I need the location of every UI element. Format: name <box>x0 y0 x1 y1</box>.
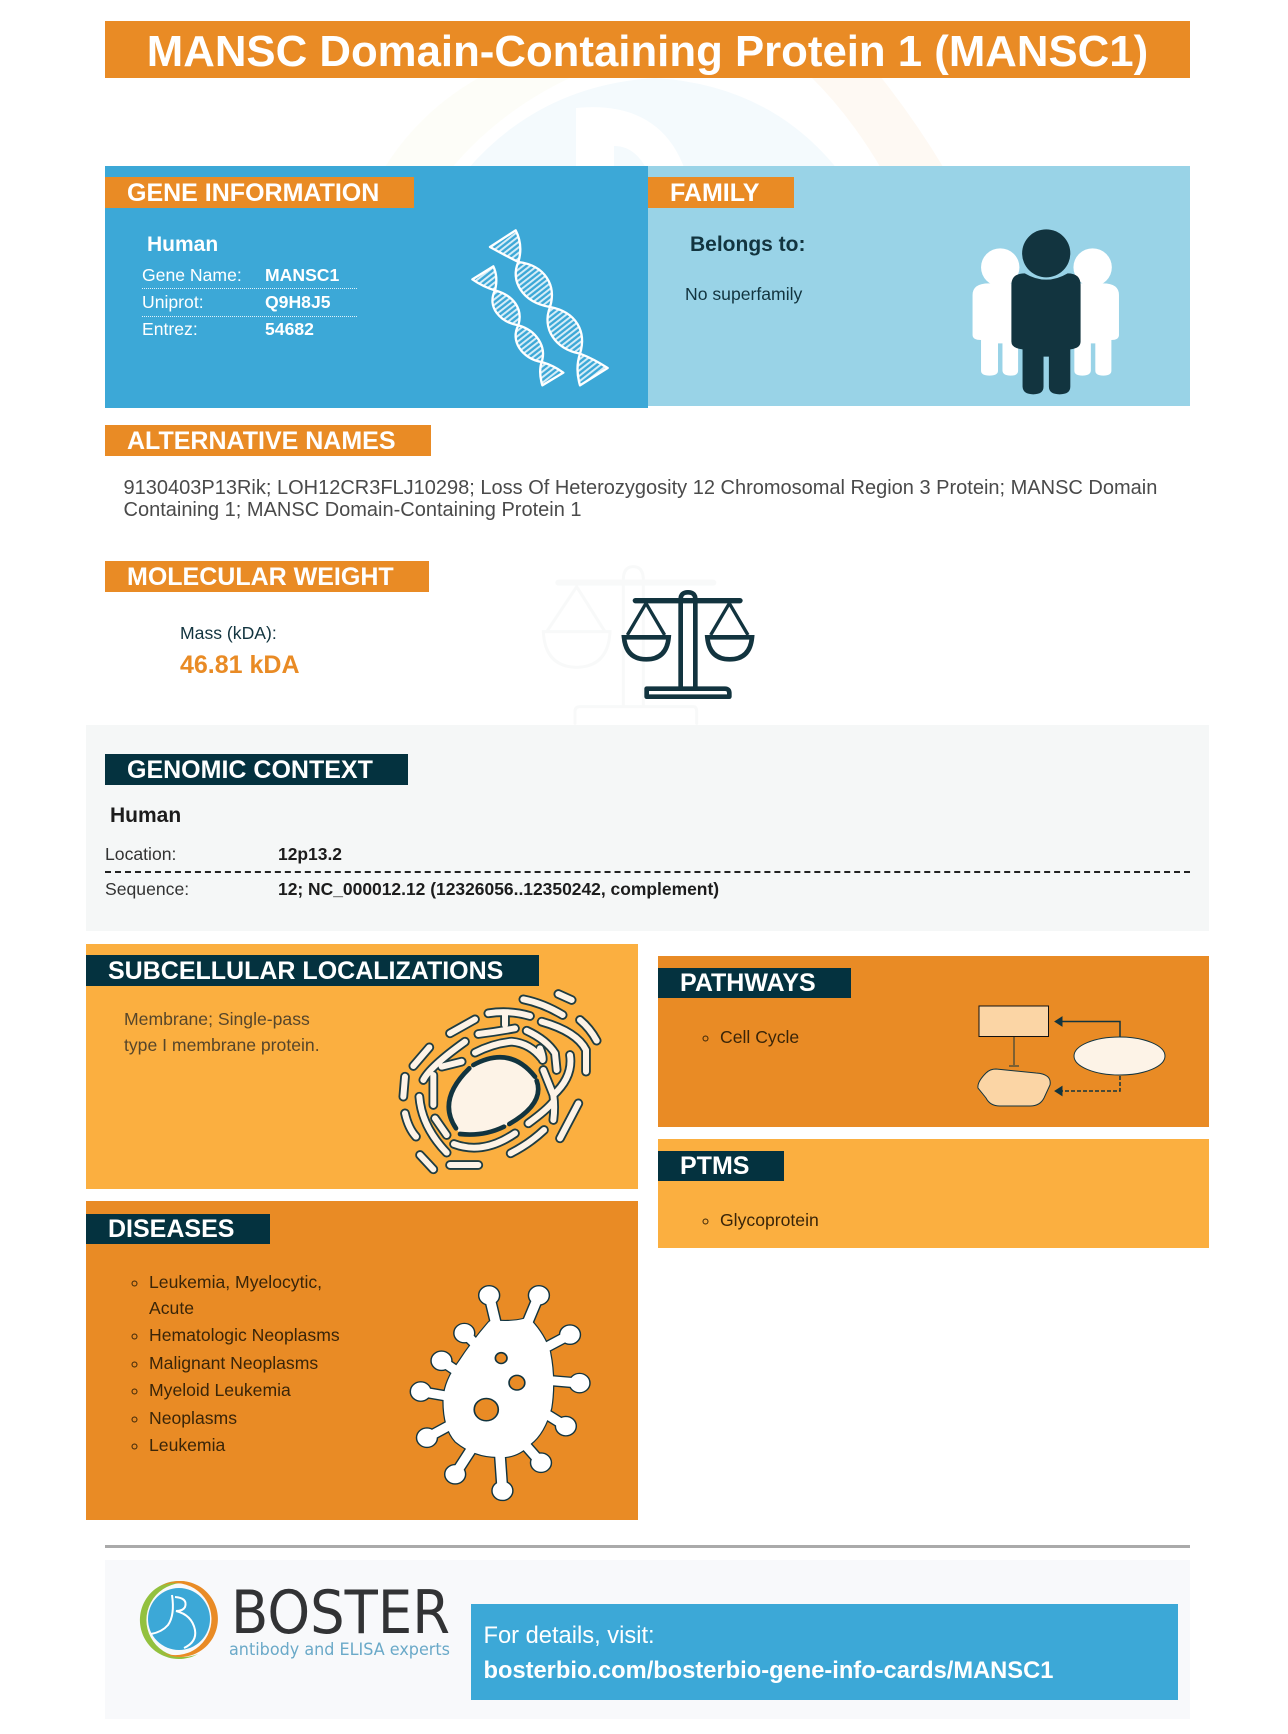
logo: boster <box>140 1578 450 1660</box>
disease list <box>132 1272 340 1455</box>
panel: footer <box>105 1560 1190 1719</box>
disease list: Neoplasms <box>149 1408 237 1428</box>
footer rule <box>105 1545 1190 1548</box>
species label: human: Human <box>110 804 181 826</box>
superfamily value: No superfamily <box>685 284 802 304</box>
disease list: Malignant Neoplasms <box>149 1353 318 1373</box>
heading: family: FAMILY <box>670 179 759 207</box>
gene name label: Gene Name: <box>142 265 242 285</box>
disease list: Hematologic Neoplasms <box>149 1325 340 1345</box>
entrez row <box>142 319 314 339</box>
species label: human: Human <box>147 233 218 256</box>
location value: 12p13.2 <box>278 844 342 864</box>
heading: genomic context: GENOMIC CONTEXT <box>127 756 373 784</box>
panel: family <box>648 166 1190 406</box>
callout intro: For details, visit: <box>484 1623 655 1649</box>
icon: dna double helix <box>471 229 609 386</box>
panel: subcellular localizations <box>86 944 638 1189</box>
title banner: MANSC Domain-Containing Protein 1 (MANSC1) <box>147 27 1148 76</box>
heading: gene information: GENE INFORMATION <box>127 179 379 207</box>
icon: endoplasmic reticulum cell <box>398 989 602 1174</box>
location label: Location: <box>105 844 176 864</box>
icon: virus <box>410 1285 591 1502</box>
localization text: Membrane; Single-pass type I membrane protein. <box>124 1009 320 1055</box>
ptm list: Glycoprotein <box>720 1210 819 1230</box>
dashed row divider <box>105 871 1190 873</box>
icon: group of people <box>972 229 1119 394</box>
heading: ptms <box>658 1151 784 1181</box>
panel: genomic context <box>86 725 1209 931</box>
mass value: 46.81 kDA <box>180 651 300 679</box>
pathway list: Cell Cycle <box>720 1027 799 1047</box>
heading: pathways: PATHWAYS <box>680 969 816 997</box>
uniprot row <box>142 289 357 317</box>
mass label: Mass (kDA): <box>180 623 277 643</box>
disease list: Leukemia <box>149 1435 225 1455</box>
watermark: faint background logo <box>471 78 942 166</box>
sequence label: Sequence: <box>105 879 189 899</box>
heading: diseases <box>86 1214 270 1244</box>
callout url: bosterbio.com/bosterbio-gene-info-cards/MANSC1 <box>484 1658 1053 1684</box>
callout: details link <box>471 1604 1178 1700</box>
heading: alternative names: ALTERNATIVE NAMES <box>127 427 396 455</box>
icon: balance scales <box>621 590 755 699</box>
uniprot label: Uniprot: <box>142 292 204 312</box>
disease list: Myeloid Leukemia <box>149 1380 291 1400</box>
gene name value: MANSC1 <box>265 265 339 285</box>
gene name row <box>142 262 357 289</box>
panel: gene information <box>105 166 648 408</box>
heading: diseases: DISEASES <box>108 1215 234 1243</box>
watermark: faint ghost scales <box>530 560 770 726</box>
heading: subcellular localizations: SUBCELLULAR LOCALIZATIONS <box>108 957 503 985</box>
panel: ptms <box>658 1139 1209 1248</box>
uniprot value: Q9H8J5 <box>265 292 331 312</box>
heading: pathways <box>658 968 851 998</box>
heading: molecular weight: MOLECULAR WEIGHT <box>127 563 394 591</box>
icon: pathway diagram <box>977 1006 1166 1106</box>
sequence value: 12; NC_000012.12 (12326056..12350242, complement) <box>278 879 719 899</box>
entrez value: 54682 <box>265 319 314 339</box>
disease list: Leukemia, Myelocytic, Acute <box>149 1272 322 1318</box>
entrez label: Entrez: <box>142 319 198 339</box>
belongs to label: Belongs to: <box>690 233 806 256</box>
panel: diseases <box>86 1201 638 1520</box>
heading: family <box>648 177 794 208</box>
tagline: antibody and ELISA experts <box>229 1640 450 1660</box>
heading: ptms: PTMS <box>680 1152 749 1180</box>
panel: pathways <box>658 956 1209 1127</box>
alternative names text: 9130403P13Rik; LOH12CR3FLJ10298; Loss Of Heterozygosity 12 Chromosomal Region 3 Protein; MANSC Domain Containing 1; MANSC Domain-Containing Protein 1 <box>124 476 1157 520</box>
